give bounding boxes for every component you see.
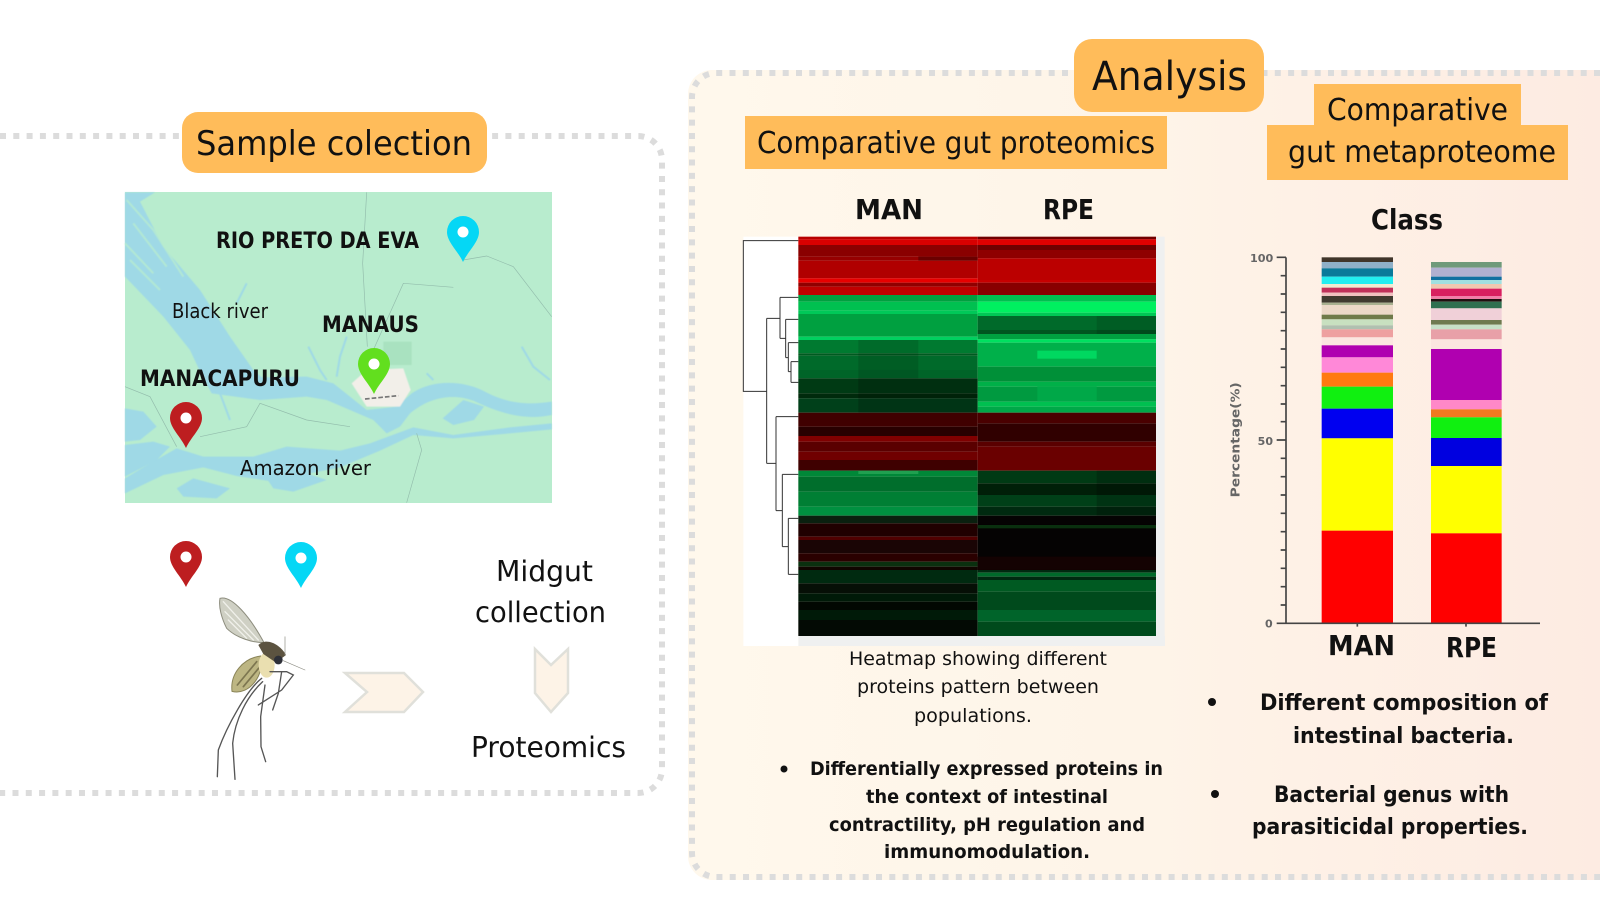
text: metaproteome findings: parasiticidal properties. (1252, 815, 1528, 840)
heatmap: replicate column variation (858, 257, 1156, 516)
heading: analysis (1074, 39, 1264, 112)
axes (1277, 257, 1540, 627)
axis labels: 100 (1250, 252, 1273, 265)
heading: sample colection (182, 112, 487, 173)
heading: comparative gut metaproteome: gut metaproteome (1288, 135, 1556, 170)
text: heatmap caption: proteins pattern between (857, 676, 1099, 698)
heading: comparative gut proteomics (745, 116, 1167, 169)
label: bar man: MAN (1328, 629, 1395, 662)
label: bar rpe: RPE (1446, 631, 1497, 664)
axis labels (1228, 252, 1273, 631)
chart: stacked bars (1228, 252, 1540, 631)
icon: sand fly (217, 598, 305, 779)
text: proteomics findings: contractility, pH regulation and (829, 814, 1145, 836)
label: manacapuru: MANACAPURU (140, 367, 300, 392)
icon: cyan map pin (447, 216, 479, 262)
dendrogram (743, 241, 798, 574)
panel: analysis (688, 39, 1600, 880)
bar: MAN (1322, 257, 1393, 623)
text: metaproteome findings: intestinal bacteria. (1293, 724, 1514, 749)
text: heatmap caption: Heatmap showing different (849, 648, 1107, 670)
axis labels: 50 (1258, 435, 1273, 448)
text: midgut collection: Midgut (496, 555, 593, 588)
axis labels: Percentage(%) (1228, 382, 1242, 497)
icon: red map pin (170, 402, 202, 448)
heading: analysis: Analysis (1092, 54, 1247, 100)
panel: sample collection (0, 112, 662, 793)
text: midgut collection (475, 555, 606, 629)
arrow: to midgut collection (345, 673, 423, 712)
heatmap: MAN columns (798, 237, 978, 636)
text: metaproteome findings: Different composition of (1260, 691, 1548, 716)
heading: sample colection: Sample colection (196, 124, 472, 164)
icon: green map pin (358, 348, 390, 394)
heading: comparative gut proteomics: Comparative gut proteomics (757, 126, 1155, 161)
label: black river: Black river (172, 299, 269, 323)
axis labels: 0 (1265, 618, 1273, 631)
text: proteomics: Proteomics (471, 731, 626, 764)
bar: RPE (1431, 262, 1502, 623)
text: metaproteome findings: Bacterial genus with (1274, 783, 1509, 808)
text: proteomics findings (780, 758, 1163, 863)
map (125, 192, 552, 503)
icon: cyan pin below map (285, 542, 317, 588)
text: midgut collection: collection (475, 596, 606, 629)
label: amazon river: Amazon river (240, 456, 372, 480)
label: manaus: MANAUS (322, 313, 419, 338)
heatmap: RPE columns (978, 237, 1156, 636)
text: heatmap caption (849, 648, 1107, 727)
chart: heatmap with dendrogram (743, 237, 1165, 646)
label: rio preto da eva: RIO PRETO DA EVA (216, 229, 419, 254)
icon: red pin below map (170, 541, 202, 587)
text: proteomics findings: Differentially expressed proteins in (810, 758, 1163, 780)
heading: comparative gut metaproteome: Comparative (1327, 93, 1508, 128)
text: proteomics findings: the context of intestinal (866, 786, 1108, 808)
text: proteomics findings: immunomodulation. (884, 841, 1090, 863)
label: heatmap rpe: RPE (1043, 193, 1094, 226)
text: metaproteome findings (1208, 691, 1548, 840)
heading: comparative gut metaproteome (1267, 84, 1568, 180)
label: heatmap man: MAN (855, 193, 923, 226)
text: heatmap caption: populations. (914, 705, 1032, 727)
label: class: Class (1371, 203, 1443, 236)
arrow: to proteomics (535, 649, 568, 712)
